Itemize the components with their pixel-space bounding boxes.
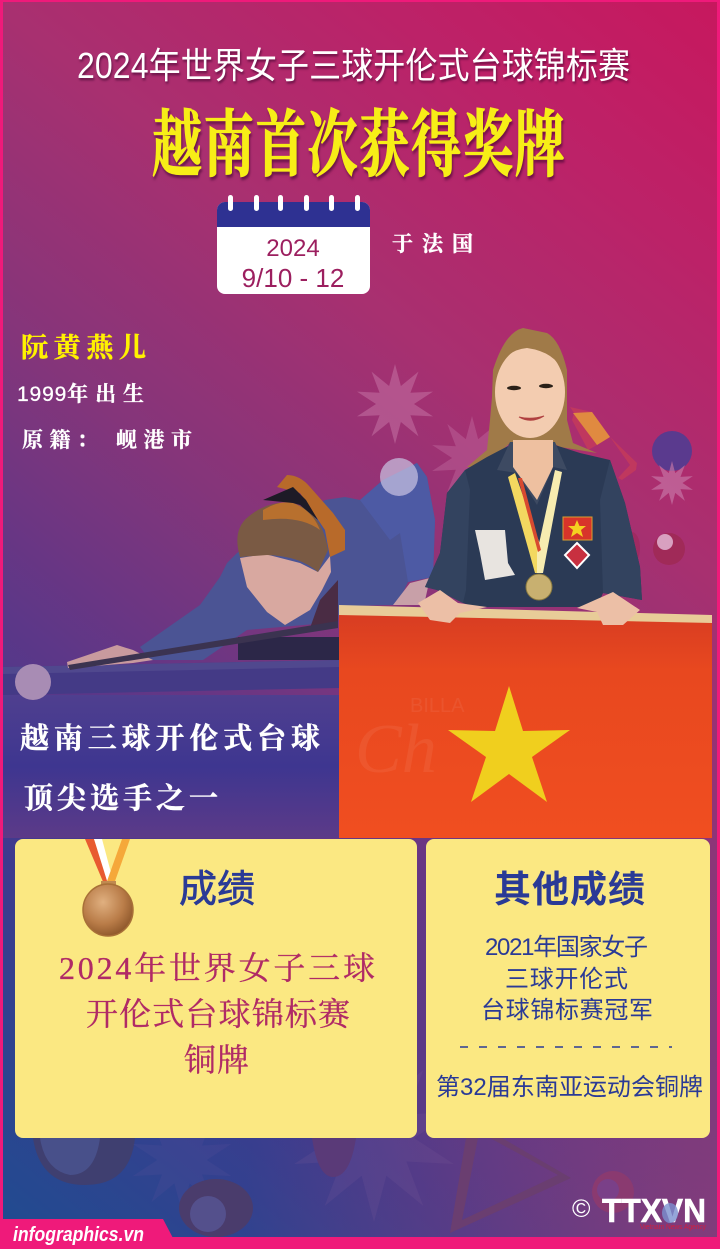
athlete name: 阮黄燕儿 bbox=[21, 333, 146, 363]
tagline line 1: 越南三球开伦式台球 bbox=[20, 722, 320, 755]
achievement text bbox=[59, 950, 375, 1078]
other achievements text: 台球锦标赛冠军 bbox=[481, 997, 653, 1024]
birth year: 1999年 出 生 bbox=[17, 382, 144, 406]
photo: player leaning over the table bbox=[3, 458, 435, 838]
calendar with date: 9/10 - 12 bbox=[242, 263, 344, 293]
achievement text: 开伦式台球锦标赛 bbox=[86, 996, 350, 1032]
Vietnamese flag held up: BILLA bbox=[410, 695, 465, 717]
hometown: 原籍： 岘港市 bbox=[22, 428, 192, 452]
TTXVN logo: Vietnam News Agency bbox=[640, 1224, 706, 1231]
site name: infographics.vn bbox=[13, 1224, 144, 1246]
Vietnamese flag held up: Ch bbox=[355, 711, 437, 788]
calendar with date: 2024 bbox=[266, 235, 320, 262]
other achievements text: 三球开伦式 bbox=[505, 966, 628, 993]
icon: bronze medal bbox=[83, 839, 133, 936]
main headline: 越南首次获得奖牌 bbox=[152, 107, 565, 186]
footer tab bbox=[0, 1219, 720, 1249]
other achievements text bbox=[436, 934, 703, 1101]
panel: other achievements bbox=[426, 839, 710, 1138]
TTXVN logo: TTXVN bbox=[602, 1192, 706, 1229]
achievement text: 铜牌 bbox=[184, 1042, 249, 1078]
heading: other achievements: 其他成绩 bbox=[494, 869, 645, 910]
photo: player with medal bbox=[425, 328, 642, 607]
panel: achievements bbox=[15, 839, 417, 1138]
heading: achievements: 成绩 bbox=[179, 869, 255, 911]
calendar with date bbox=[217, 195, 370, 294]
other achievements text: 第32届东南亚运动会铜牌 bbox=[436, 1074, 703, 1101]
decorative billiard shapes, lower bbox=[33, 1054, 634, 1237]
warm lower right tint bbox=[200, 760, 720, 1249]
decorative billiard shapes, upper bbox=[357, 364, 693, 565]
other achievements text: 2021年国家女子 bbox=[485, 934, 648, 961]
TTXVN logo: © bbox=[572, 1195, 591, 1223]
Vietnamese flag held up bbox=[339, 590, 712, 838]
tagline line 2: 顶尖选手之一 bbox=[24, 782, 218, 815]
achievement text: 2024年世界女子三球 bbox=[59, 950, 375, 986]
location text: 于法国 bbox=[392, 232, 473, 256]
title line: 2024年世界女子三球开伦式台球锦标赛 bbox=[77, 46, 630, 86]
